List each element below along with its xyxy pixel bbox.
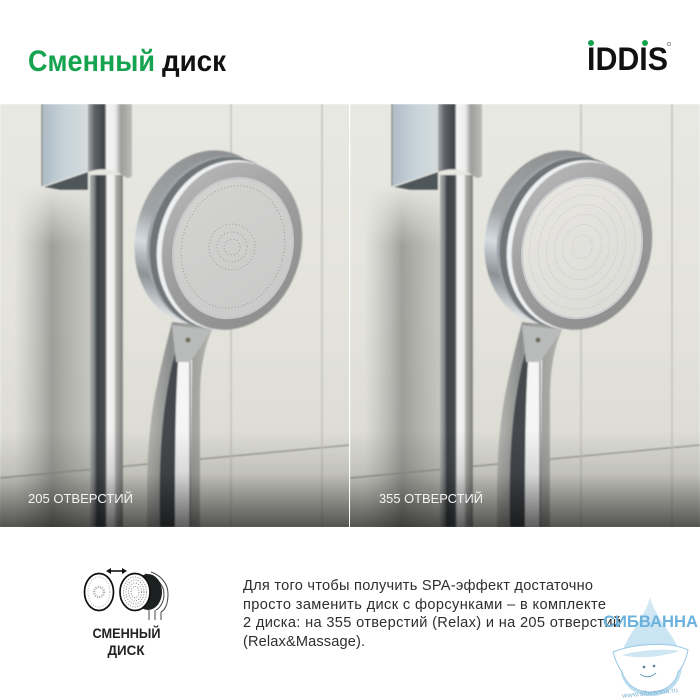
title: Сменный — [28, 45, 155, 78]
icon label: СМЕННЫЙ — [92, 626, 160, 641]
title: диск — [162, 45, 227, 78]
panel: photo with 355-hole disc — [350, 104, 700, 530]
description text: Для того чтобы получить SPA-эффект достаточно — [243, 578, 593, 594]
shower disc with 355 holes — [521, 176, 643, 320]
icon label: ДИСК — [108, 643, 145, 658]
description text — [243, 578, 621, 650]
description text: просто заменить диск с форсунками – в комплекте — [243, 597, 606, 613]
watermark: Sibvanna: СИБВАННА — [603, 613, 698, 631]
shower disc with 205 holes — [172, 177, 294, 320]
description text: 2 диска: на 355 отверстий (Relax) и на 205 отверстий — [243, 615, 621, 631]
icon label — [92, 626, 160, 658]
caption fade — [0, 442, 349, 527]
description text: (Relax&Massage). — [243, 634, 365, 650]
watermark: Sibvanna: www.sibvanna.ru — [621, 687, 678, 700]
caption: 205 holes: 205 ОТВЕРСТИЙ — [28, 491, 133, 506]
caption fade — [350, 442, 700, 527]
panel: photo with 205-hole disc — [0, 104, 350, 530]
caption: 355 holes: 355 ОТВЕРСТИЙ — [379, 491, 483, 506]
icon: replaceable disc — [84, 568, 168, 620]
watermark: Sibvanna — [603, 597, 698, 700]
logo: iDDiS: IDDIS — [587, 41, 668, 77]
